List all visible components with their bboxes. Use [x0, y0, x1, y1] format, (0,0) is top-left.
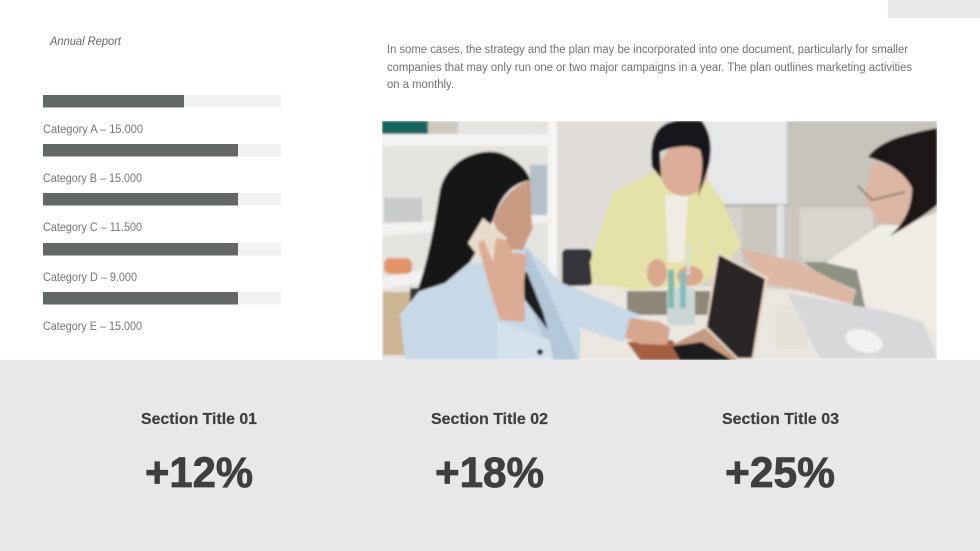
- bar: Category B: Category B – 15.000: [43, 173, 142, 185]
- stat: Section 03: [722, 411, 839, 497]
- woman 3: arms: [740, 248, 856, 304]
- bar: Category E: [43, 292, 281, 333]
- woman 3: face and hair: [864, 162, 917, 226]
- stat: Section 02: +18%: [435, 449, 544, 497]
- heading: Annual Report: Annual Report: [49, 36, 122, 48]
- text block: intro paragraph: on a monthly.: [387, 79, 454, 91]
- stat: Section 02: Section Title 02: [431, 411, 548, 428]
- stat: Section 02: [431, 411, 548, 497]
- bar: Category A: [43, 95, 281, 136]
- bar: Category A: Category A – 15.000: [43, 124, 143, 136]
- woman 1: phone: [468, 218, 507, 262]
- corner tab: [888, 0, 980, 18]
- stat: Section 03: +25%: [725, 449, 835, 497]
- stat: Section 01: [141, 411, 257, 497]
- silver laptop: [787, 293, 937, 358]
- woman 1: other hand: [625, 318, 670, 345]
- bar: Category D: Category D – 9.000: [43, 272, 137, 284]
- dark laptop: [672, 328, 738, 360]
- text block: intro paragraph: companies that may only run one or two major campaigns in a year. The plan outlines marketing activities: [387, 62, 912, 74]
- woman 2: hands: [647, 259, 667, 287]
- bar chart: categories: [43, 95, 281, 333]
- woman 2: face and hair: [660, 144, 708, 196]
- bar: Category E: Category E – 15.000: [43, 321, 142, 333]
- glass with pens: [667, 288, 695, 325]
- text block: intro paragraph: [387, 44, 912, 91]
- mug: [775, 305, 808, 349]
- bar: Category C: [43, 193, 281, 234]
- stat: Section 03: Section Title 03: [722, 411, 839, 428]
- woman 1: jacket: [400, 247, 640, 360]
- stat: Section 01: +12%: [145, 449, 253, 497]
- woman 3: shirt: [827, 212, 937, 297]
- photo: three women working at a table: [382, 121, 937, 360]
- woman 1: hair: [417, 152, 530, 292]
- table: [570, 284, 937, 360]
- woman 1: face: [493, 180, 533, 250]
- bar: Category C: Category C – 11.500: [43, 222, 142, 234]
- shelves: [382, 121, 428, 136]
- woman 2: jacket: [590, 170, 741, 290]
- stat: Section 01: Section Title 01: [141, 411, 257, 428]
- bar: Category D: [43, 243, 281, 284]
- bar: Category B: [43, 144, 281, 185]
- bottom band: [0, 360, 980, 551]
- text block: intro paragraph: In some cases, the strategy and the plan may be incorporated into one document, particularly for smaller: [387, 44, 908, 56]
- woman 1: hand: [478, 238, 527, 322]
- chair: [562, 249, 592, 286]
